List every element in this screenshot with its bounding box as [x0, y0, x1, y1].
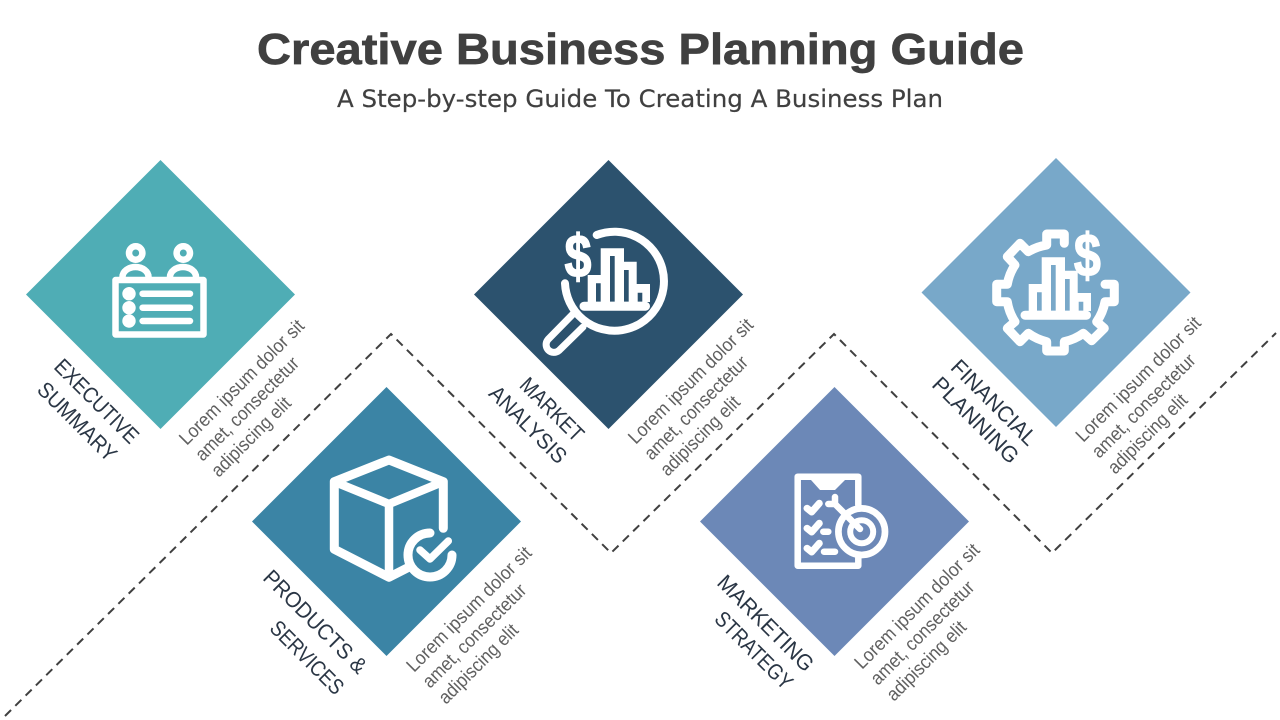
description: executive summary: amet, consectetur: [191, 353, 304, 466]
diamond: products and services: [252, 387, 521, 656]
label: marketing strategy: STRATEGY: [710, 606, 798, 695]
label: financial planning: PLANNING: [927, 372, 1024, 469]
label: marketing strategy: MARKETING: [712, 570, 819, 677]
panel: products and services: [252, 387, 537, 709]
label: executive summary: EXECUTIVE: [49, 354, 144, 449]
description: products and services: Lorem ipsum dolor sit: [403, 542, 537, 677]
panel: market analysis: [474, 160, 758, 481]
label: products and services: PRODUCTS &: [258, 565, 372, 679]
panel: financial planning: [922, 158, 1206, 479]
icon: checklist with target: [798, 477, 885, 566]
label: executive summary: SUMMARY: [32, 377, 122, 467]
description: marketing strategy: Lorem ipsum dolor sit: [851, 539, 985, 674]
description: market analysis: amet, consectetur: [640, 352, 753, 465]
icon: gear with chart and dollar: $: [1074, 222, 1101, 289]
dashed zigzag connector: [5, 333, 1276, 716]
description: market analysis: adipiscing elit: [656, 392, 745, 481]
icon: meeting board with two people: [116, 246, 204, 334]
description: financial planning: adipiscing elit: [1104, 390, 1193, 479]
description: market analysis: Lorem ipsum dolor sit: [624, 314, 758, 449]
label: financial planning: FINANCIAL: [946, 354, 1042, 451]
panel: executive summary: [26, 160, 309, 482]
description: products and services: adipiscing elit: [435, 620, 524, 709]
description: products and services: amet, consectetur: [419, 580, 532, 693]
description: financial planning: amet, consectetur: [1088, 350, 1201, 463]
subtitle: A Step-by-step Guide To Creating A Business Plan: [337, 85, 943, 113]
description: executive summary: Lorem ipsum dolor sit: [175, 315, 309, 450]
diamond: marketing strategy: [700, 387, 969, 656]
icon: gear with chart and dollar: [997, 222, 1114, 351]
panel: marketing strategy: [700, 387, 985, 706]
diamond: market analysis: [474, 160, 743, 429]
label: market analysis: ANALYSIS: [484, 381, 572, 469]
icon: box with check badge: [334, 460, 452, 577]
label: products and services: SERVICES: [265, 615, 349, 700]
title: Creative Business Planning Guide: [257, 25, 1024, 74]
description: marketing strategy: amet, consectetur: [867, 577, 980, 690]
label: market analysis: MARKET: [515, 372, 589, 447]
description: executive summary: adipiscing elit: [207, 393, 296, 482]
icon: magnifier with chart and dollar: [546, 223, 664, 352]
diamond: executive summary: [26, 160, 295, 429]
description: marketing strategy: adipiscing elit: [883, 617, 972, 706]
diamond: financial planning: [922, 158, 1190, 427]
description: financial planning: Lorem ipsum dolor sit: [1072, 312, 1206, 447]
icon: magnifier with chart and dollar: $: [565, 223, 591, 290]
